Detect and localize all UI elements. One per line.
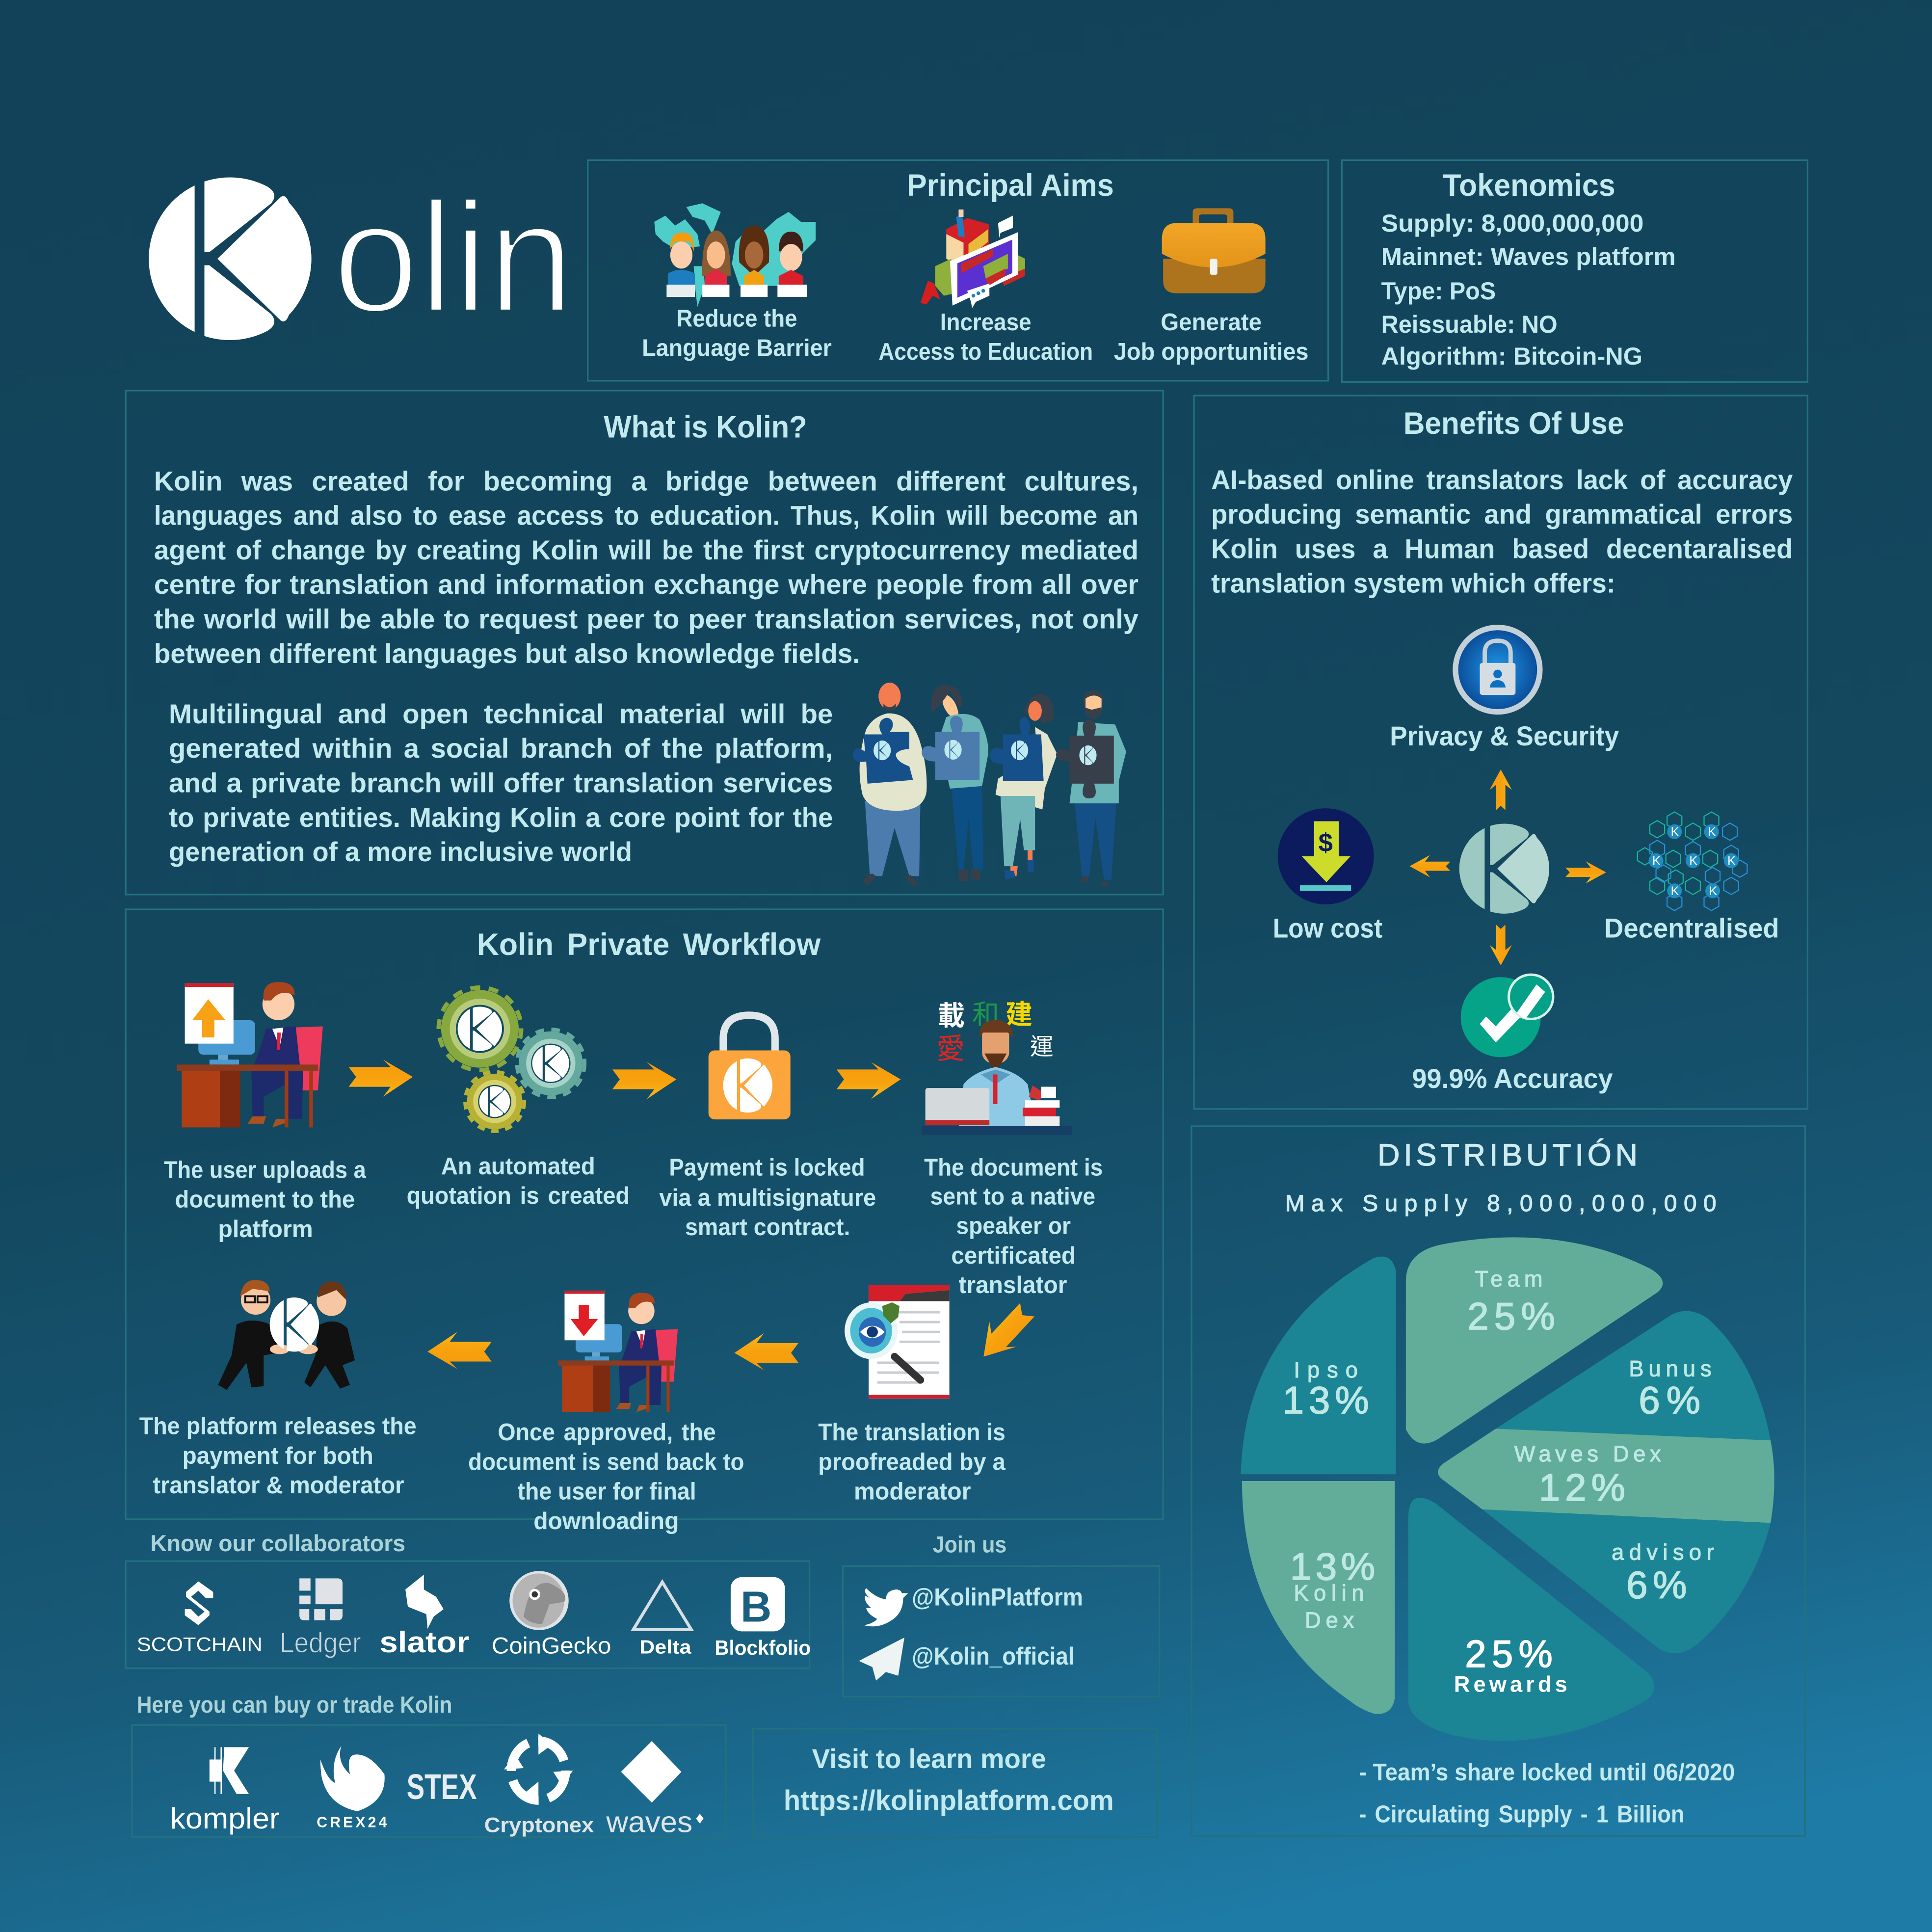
illustration: native speaker translator: 愛	[936, 1033, 965, 1065]
icon: decentralised network: K	[1671, 825, 1679, 839]
paragraph: multilingual material: Multilingual and open technical material will be	[169, 699, 833, 729]
text: step 3: smart contract.	[685, 1214, 850, 1241]
paragraph: kolin introduction: Kolin was created for becoming a bridge between different cultures,	[154, 466, 1138, 496]
paragraph: multilingual material	[169, 699, 833, 867]
text: generate job opportunities: Job opportunities	[1114, 339, 1309, 365]
slice: advisor	[1482, 1509, 1771, 1653]
text: twitter handle: @KolinPlatform	[912, 1584, 1083, 1611]
panel: benefits of use	[1194, 396, 1807, 1109]
text: generate job opportunities: Generate	[1161, 309, 1262, 336]
paragraph: kolin introduction: between different languages but also knowledge fields.	[154, 638, 860, 669]
icon: low cost	[1278, 808, 1374, 904]
slice: bunus	[1496, 1311, 1771, 1440]
slice: rewards: 25%	[1465, 1633, 1553, 1675]
heading: buy or trade: Here you can buy or trade Kolin	[137, 1692, 452, 1718]
paragraph: benefits intro: translation system which offers:	[1211, 568, 1615, 599]
text: step 4: translator	[958, 1272, 1067, 1298]
arrow: step 5 to 6	[734, 1333, 798, 1370]
illustration: native speaker translator: 和	[972, 1000, 999, 1030]
arrow: step 1 to 2	[349, 1059, 413, 1097]
paragraph: benefits intro	[1211, 465, 1793, 599]
text: step 1: document to the	[175, 1187, 355, 1213]
logo: cryptonex: Cryptonex	[484, 1814, 594, 1837]
slice: advisor: advisor	[1612, 1540, 1714, 1565]
logo: coingecko	[492, 1571, 611, 1659]
slice: team	[1406, 1237, 1663, 1444]
paragraph: kolin introduction: agent of change by creating Kolin will be the first cryptocurrency mediated	[154, 535, 1138, 565]
note: supply notes: - Circulating Supply - 1 Billion	[1359, 1801, 1684, 1828]
text: reduce the language barrier	[642, 305, 832, 362]
panel: visit	[753, 1729, 1157, 1837]
text: reduce the language barrier: Reduce the	[676, 305, 797, 332]
panel: principal aims	[588, 160, 1328, 381]
panel: workflow	[126, 909, 1163, 1535]
text: visit to learn more: Visit to learn more	[812, 1744, 1046, 1774]
logo: crex24	[317, 1746, 387, 1831]
slice: ipso: Ipso	[1294, 1357, 1358, 1382]
text: step 3: via a multisignature	[659, 1185, 876, 1211]
paragraph: multilingual material: to private entities. Making Kolin a core point for the	[169, 802, 833, 833]
icon: accuracy check	[1461, 975, 1553, 1057]
heading: distribution: DISTRIBUTIÓN	[1377, 1138, 1638, 1172]
illustration: native speaker translator	[922, 1000, 1072, 1135]
text: step 4: certificated	[951, 1243, 1076, 1269]
paragraph: kolin introduction: centre for translation and information exchange where people from all over	[154, 569, 1138, 600]
logo: cryptonex	[484, 1734, 594, 1837]
slice: waves dex	[1438, 1429, 1774, 1523]
text: increase access to education	[878, 309, 1093, 365]
logo: ledger: Ledger	[280, 1627, 361, 1659]
icon: twitter	[864, 1588, 908, 1626]
panel: collaborators	[126, 1561, 811, 1668]
icon: decentralised network	[1638, 812, 1747, 911]
list: token details: Reissuable: NO	[1381, 311, 1558, 338]
heading: benefits of use: Benefits Of Use	[1403, 406, 1624, 441]
text: step 7: translator & moderator	[153, 1472, 404, 1499]
slice: bunus: 6%	[1639, 1379, 1700, 1422]
panel: join us	[843, 1566, 1160, 1696]
text: step 6: the user for final	[518, 1479, 696, 1505]
panel: distribution	[1191, 1126, 1805, 1836]
pie chart: token distribution	[1241, 1237, 1774, 1741]
illustration: user downloading document	[558, 1291, 678, 1412]
icon: Kolin K mark	[149, 178, 312, 340]
slice: kolin dex: 13%	[1290, 1546, 1375, 1588]
illustration: proofreading	[845, 1285, 950, 1399]
text: step 6: downloading	[533, 1508, 679, 1535]
icon: decentralised network: K	[1709, 884, 1718, 898]
list: token details	[1381, 210, 1676, 370]
slice: kolin dex	[1242, 1481, 1395, 1714]
logo: delta	[634, 1582, 691, 1658]
logo: scotchain: SCOTCHAIN	[137, 1634, 263, 1656]
paragraph: kolin introduction	[154, 466, 1138, 669]
illustration: native speaker translator: 載	[938, 1001, 965, 1031]
slice: rewards	[1408, 1498, 1654, 1741]
arrow: down	[1490, 925, 1512, 965]
arrow: up	[1490, 769, 1512, 810]
slice: ipso: 13%	[1283, 1379, 1369, 1422]
text: step 7: The platform releases the	[139, 1413, 417, 1440]
text: step 2: quotation is created	[407, 1183, 630, 1209]
paragraph: kolin introduction: the world will be able to request peer to peer translation services, not only	[154, 604, 1138, 635]
wordmark: olin	[333, 169, 574, 345]
text: step 1: platform	[218, 1216, 313, 1243]
paragraph: benefits intro: producing semantic and grammatical errors	[1211, 499, 1793, 529]
icon: people and world map	[654, 203, 816, 307]
text: step 5: The translation is	[818, 1419, 1006, 1446]
label: low cost: Low cost	[1273, 913, 1382, 944]
text: generate job opportunities	[1114, 309, 1309, 365]
logo: crex24: CREX24	[317, 1815, 387, 1831]
illustration: user uploading document	[177, 982, 323, 1127]
text: step 4	[924, 1154, 1103, 1298]
text: step 5: proofreaded by a	[818, 1449, 1006, 1475]
text: step 7	[139, 1413, 417, 1499]
text: step 1: The user uploads a	[164, 1157, 366, 1183]
icon: low cost: $	[1319, 828, 1333, 857]
label: accuracy: 99.9% Accuracy	[1412, 1063, 1613, 1094]
logo: Kolin	[149, 169, 574, 345]
slice: advisor: 6%	[1626, 1564, 1687, 1607]
logo: waves: waves	[606, 1805, 692, 1839]
paragraph: multilingual material: and a private branch will offer translation services	[169, 768, 833, 798]
panel: exchanges	[132, 1725, 726, 1839]
illustration: native speaker translator: 運	[1030, 1034, 1054, 1060]
heading: know our collaborators: Know our collaborators	[150, 1531, 405, 1557]
text: step 6: Once approved, the	[498, 1419, 716, 1446]
slice: bunus: Bunus	[1629, 1356, 1712, 1381]
icon: decentralised network: K	[1689, 854, 1697, 868]
text: step 4: The document is	[924, 1154, 1103, 1181]
paragraph: benefits intro: AI-based online translators lack of accuracy	[1211, 465, 1793, 495]
panel: tokenomics	[1342, 160, 1807, 382]
text: step 3: Payment is locked	[669, 1154, 865, 1181]
note: supply notes	[1359, 1759, 1735, 1828]
text: increase access to education: Access to Education	[878, 339, 1093, 365]
heading: principal aims: Principal Aims	[907, 168, 1114, 203]
icon: decentralised network: K	[1727, 854, 1736, 868]
icon: books and tablet	[921, 210, 1025, 308]
list: token details: Mainnet: Waves platform	[1381, 243, 1676, 270]
slice: team: 25%	[1467, 1296, 1555, 1338]
paragraph: multilingual material: generation of a more inclusive world	[169, 837, 632, 867]
slice: kolin dex: Dex	[1305, 1608, 1354, 1633]
icon: decentralised network: K	[1708, 825, 1716, 839]
label: decentralised: Decentralised	[1604, 913, 1779, 944]
text: step 7: payment for both	[183, 1443, 373, 1469]
list: token details: Algorithm: Bitcoin-NG	[1381, 343, 1642, 370]
illustration: four people holding puzzle pieces	[853, 683, 1126, 887]
heading: tokenomics: Tokenomics	[1443, 168, 1615, 203]
text: step 1	[164, 1157, 366, 1243]
text: step 6: document is send back to	[468, 1449, 744, 1475]
slice: ipso	[1241, 1257, 1396, 1474]
logo: stex: STEX	[407, 1767, 477, 1807]
text: step 4: speaker or	[956, 1213, 1071, 1240]
text: step 2	[407, 1153, 630, 1209]
slice: team: Team	[1475, 1266, 1543, 1291]
logo: slator: slator	[379, 1625, 470, 1659]
list: token details: Supply: 8,000,000,000	[1381, 210, 1643, 237]
paragraph: benefits intro: Kolin uses a Human based decentaralised	[1211, 533, 1793, 564]
logo: kompler: kompler	[170, 1801, 280, 1835]
text: step 5	[818, 1419, 1006, 1505]
icon: decentralised network: K	[1652, 854, 1661, 868]
panel: what is kolin	[126, 391, 1163, 895]
paragraph: kolin introduction: languages and also to ease access to education. Thus, Kolin will become an	[154, 501, 1138, 531]
icon: decentralised network: K	[1671, 884, 1679, 898]
label: privacy & security: Privacy & Security	[1390, 721, 1619, 751]
logo: kompler	[170, 1747, 280, 1835]
text: telegram handle: @Kolin_official	[912, 1642, 1074, 1670]
slice: rewards: Rewards	[1454, 1671, 1567, 1696]
logo: blockfolio: B	[741, 1582, 771, 1631]
slice: kolin dex: Kolin	[1294, 1581, 1364, 1606]
slice: waves dex: 12%	[1539, 1467, 1625, 1509]
logo: blockfolio	[715, 1577, 811, 1659]
note: supply notes: - Team’s share locked until 06/2020	[1359, 1759, 1735, 1786]
text: step 6	[468, 1419, 744, 1535]
logo: delta: Delta	[639, 1637, 691, 1658]
text: step 3	[659, 1154, 876, 1241]
icon: privacy lock	[1453, 625, 1543, 715]
arrow: step 4 to 5	[969, 1297, 1040, 1368]
text: step 4: sent to a native	[930, 1183, 1095, 1210]
illustration: native speaker translator: 建	[1006, 1000, 1032, 1030]
heading: what is kolin: What is Kolin?	[604, 410, 807, 444]
link text: website: https://kolinplatform.com	[784, 1785, 1114, 1816]
text: step 2: An automated	[441, 1153, 595, 1180]
illustration: padlock	[709, 1015, 791, 1119]
icon: central kolin logo	[1459, 823, 1549, 914]
icon: briefcase	[1162, 208, 1266, 293]
arrow: right	[1565, 861, 1606, 883]
heading: join us: Join us	[933, 1532, 1006, 1558]
arrow: step 3 to 4	[837, 1062, 900, 1099]
heading: kolin private workflow: Kolin Private Workflow	[477, 927, 820, 962]
text: increase access to education: Increase	[940, 309, 1032, 336]
logo: blockfolio: Blockfolio	[715, 1637, 811, 1659]
arrow: left	[1409, 855, 1450, 877]
subheading: max supply: Max Supply 8,000,000,000	[1285, 1191, 1717, 1217]
logo: waves	[606, 1741, 704, 1839]
logo: slator	[379, 1575, 470, 1659]
slice: waves dex: Waves Dex	[1514, 1441, 1661, 1466]
paragraph: multilingual material: generated within a social branch of the platform,	[169, 733, 833, 764]
logo: scotchain	[137, 1582, 263, 1656]
list: token details: Type: PoS	[1381, 277, 1496, 305]
logo: coingecko: CoinGecko	[492, 1633, 611, 1659]
arrow: step 6 to 7	[427, 1332, 492, 1369]
text: step 5: moderator	[854, 1479, 971, 1505]
illustration: handshake with kolin coin	[218, 1280, 355, 1390]
icon: telegram	[859, 1638, 904, 1681]
text: reduce the language barrier: Language Barrier	[642, 335, 832, 362]
logo: ledger	[280, 1578, 361, 1659]
illustration: gears	[439, 987, 584, 1131]
arrow: step 2 to 3	[612, 1062, 676, 1099]
